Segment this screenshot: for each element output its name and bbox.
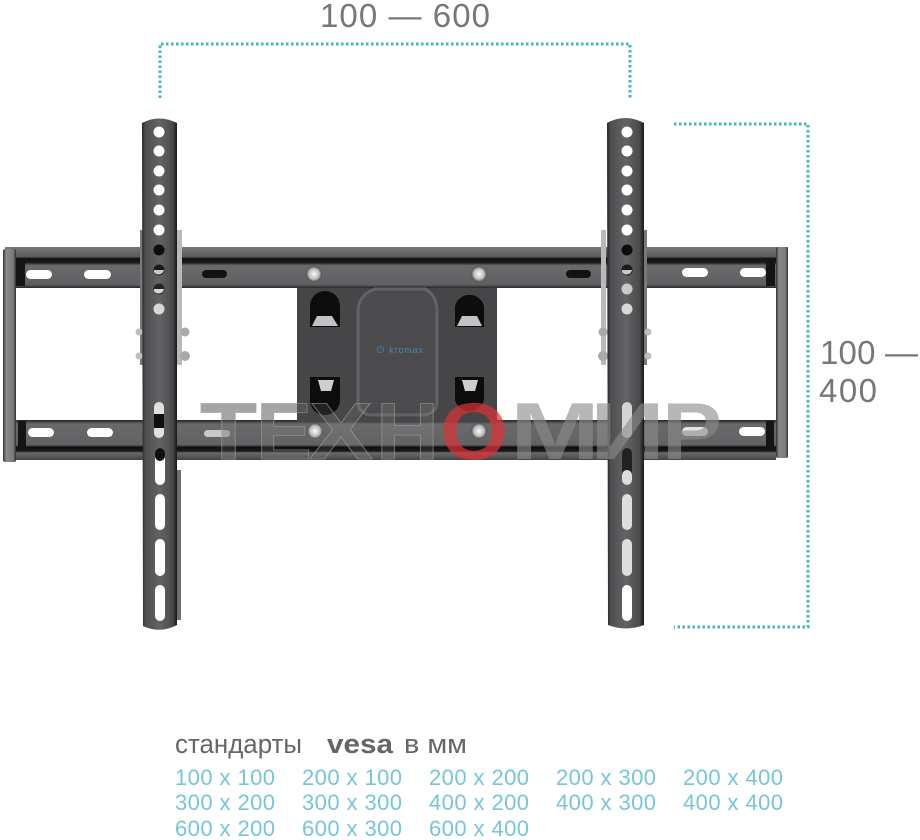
- right hinge brackets: [598, 230, 652, 365]
- brand logo: ⊙ kromax: [376, 345, 424, 355]
- VESA size list: 200 x 200: [429, 765, 529, 790]
- heading: VESA standards: в мм: [404, 729, 467, 759]
- watermark: Н: [376, 387, 439, 477]
- watermark: Е: [256, 387, 312, 477]
- watermark: [200, 387, 722, 477]
- bottom rail: [16, 420, 776, 460]
- heading: VESA standards: vesa: [327, 729, 394, 759]
- right vertical plate: [607, 118, 644, 628]
- wall mount: [3, 118, 788, 630]
- right dimension bracket: [674, 124, 808, 627]
- left vertical plate: [142, 118, 177, 630]
- left end bar: [3, 249, 16, 462]
- VESA size list: 200 x 100: [302, 765, 402, 790]
- VESA size list: 200 x 300: [556, 765, 656, 790]
- rail bolts: [306, 266, 487, 439]
- heading: VESA standards: стандарты: [175, 729, 302, 759]
- watermark: И: [590, 387, 665, 477]
- top rail: [5, 247, 788, 288]
- watermark: Р: [662, 387, 722, 477]
- label: vertical range: 100 —: [820, 334, 918, 371]
- watermark: М: [510, 387, 600, 477]
- heading: VESA standards: [175, 729, 467, 759]
- watermark: Т: [200, 387, 257, 477]
- watermark: Х: [309, 387, 373, 477]
- VESA size list: 200 x 400: [683, 765, 783, 790]
- VESA size list: 400 x 200: [429, 790, 529, 815]
- watermark: Е: [256, 387, 312, 477]
- right end bar: [776, 247, 788, 458]
- VESA size list: 100 x 100: [175, 765, 275, 790]
- VESA size list: [175, 765, 783, 840]
- VESA size list: 300 x 200: [175, 790, 275, 815]
- watermark: О: [440, 387, 508, 477]
- watermark: Т: [200, 387, 257, 477]
- label: vertical range: [819, 334, 918, 409]
- VESA size list: 400 x 300: [556, 790, 656, 815]
- left hinge brackets: [136, 230, 190, 620]
- watermark: Х: [309, 387, 373, 477]
- watermark: Н: [376, 387, 439, 477]
- VESA size list: 300 x 300: [302, 790, 402, 815]
- label: vertical range: 400: [819, 372, 877, 409]
- centre mounting plate: [297, 288, 497, 422]
- VESA size list: 400 x 400: [683, 790, 783, 815]
- top dimension bracket: [160, 44, 630, 98]
